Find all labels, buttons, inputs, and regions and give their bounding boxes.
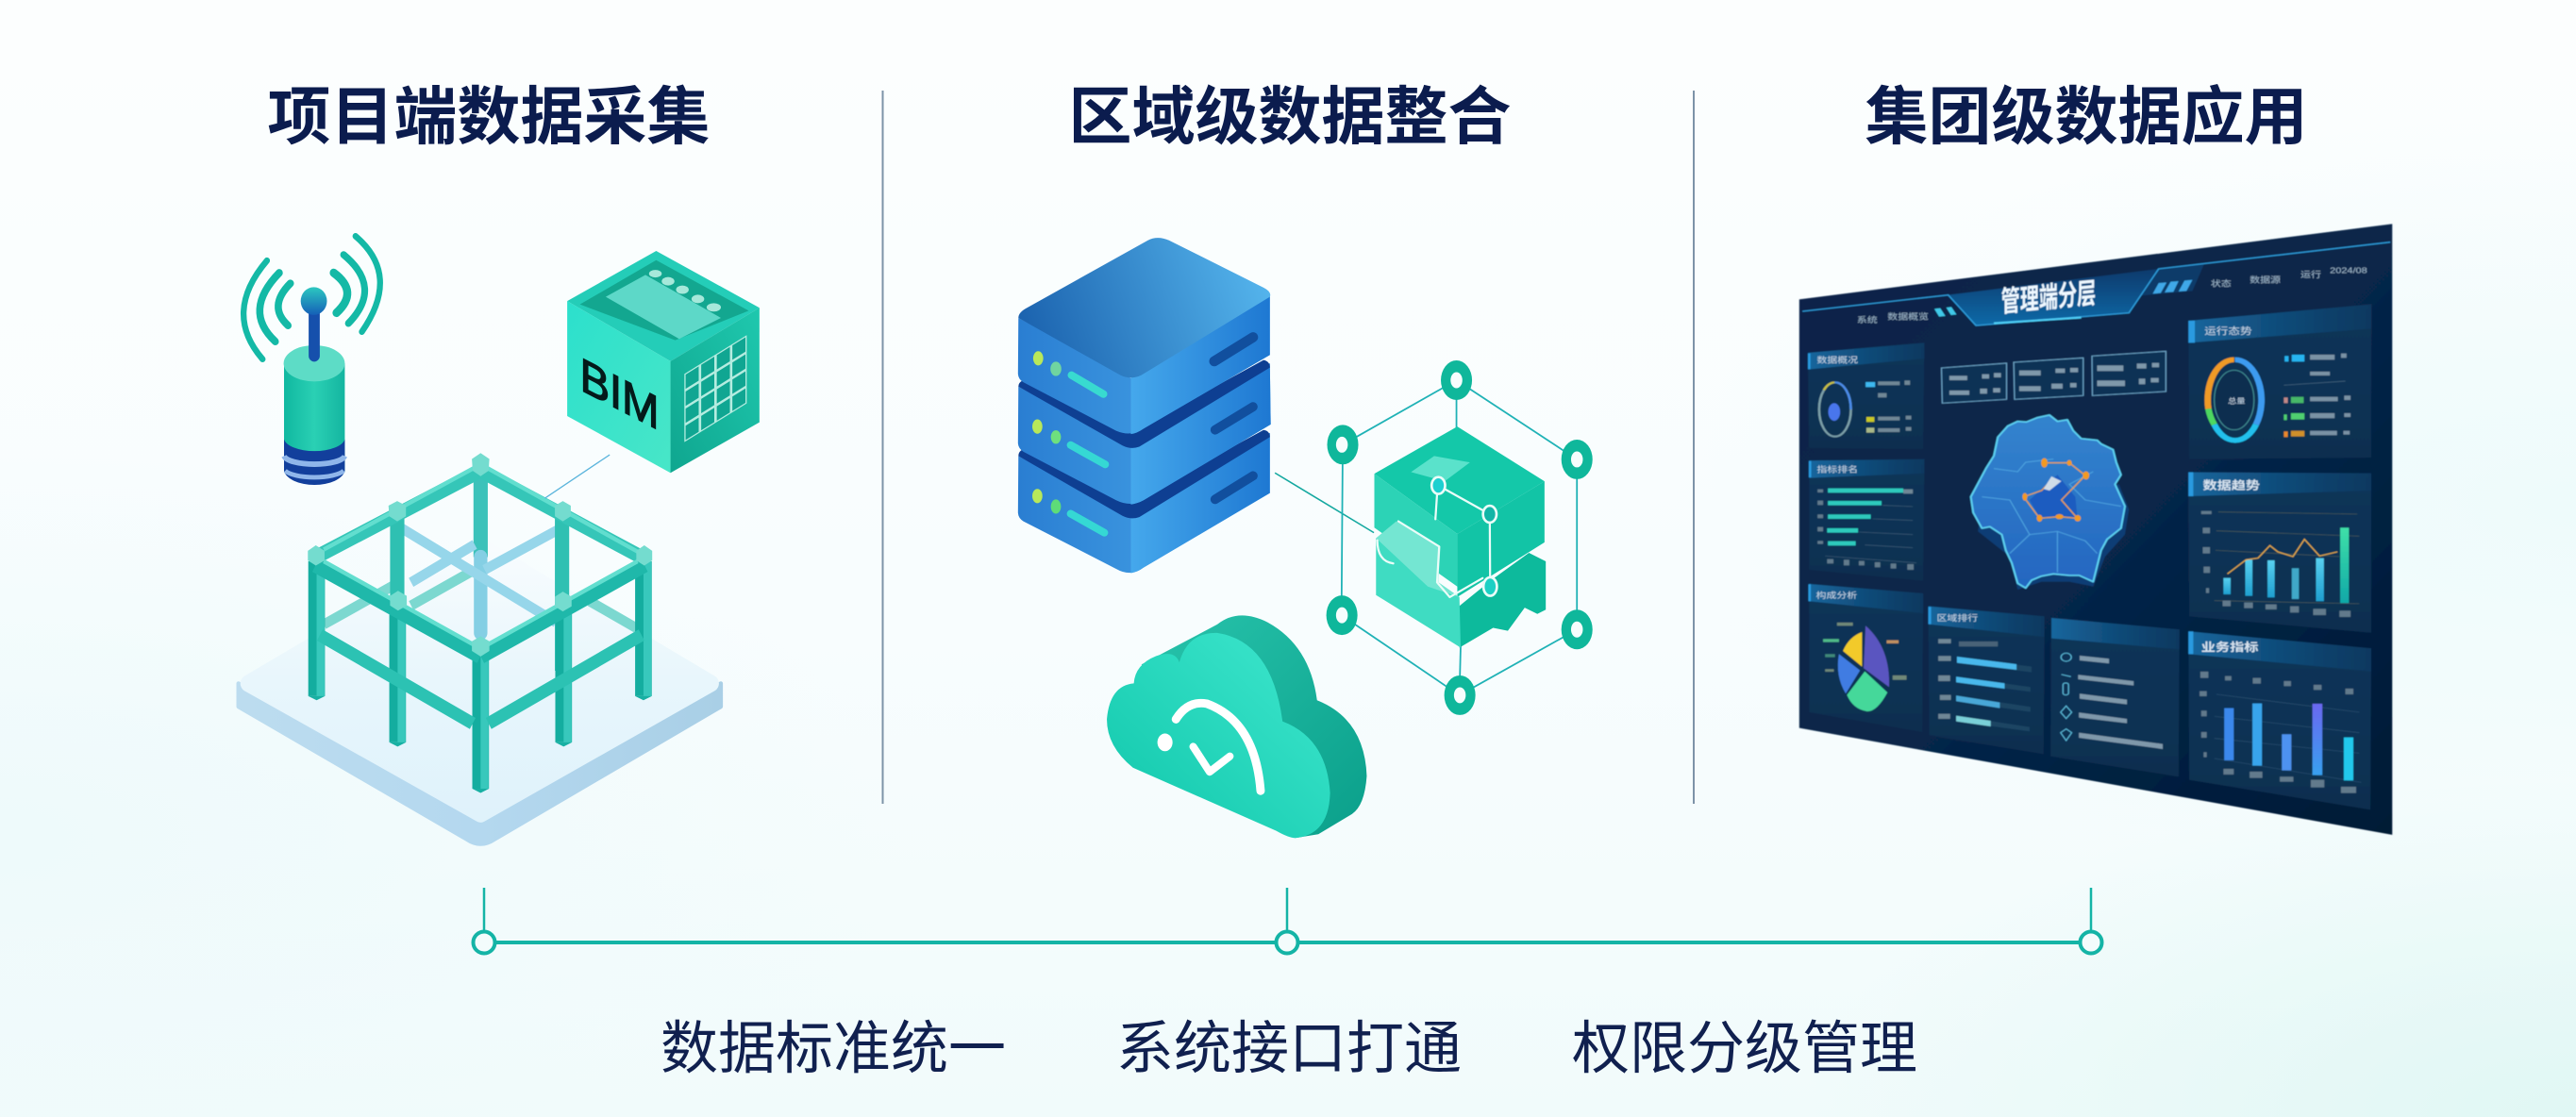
- panel: left donut: 数据概况: [1816, 355, 1858, 365]
- dashboard header: 管理端分层: [2001, 276, 2096, 319]
- heading: 项目端数据采集: 项目端数据采集: [268, 82, 710, 153]
- panel: column chart: 业务指标: [2201, 641, 2259, 654]
- icon: building steel frame: [308, 453, 652, 792]
- icon: BIM cube: BIM: [580, 346, 659, 441]
- panel: left horizontal bars: 指标排名: [1816, 464, 1858, 475]
- timeline node 2: [1276, 932, 1298, 953]
- panel: pie chart: [1809, 584, 1923, 732]
- panel: progress bars: [1929, 607, 2045, 754]
- illustration: project site data collection: [239, 236, 760, 844]
- panel: right bars and line chart: 数据趋势: [2202, 478, 2260, 492]
- panel: right donut: [2188, 305, 2371, 459]
- icon: BIM cube: [567, 251, 760, 473]
- timeline connector: [474, 888, 2102, 953]
- dashboard header: [1802, 242, 2390, 325]
- dashboard header: 数据源: [2250, 275, 2281, 285]
- panel: status list: [2050, 618, 2180, 776]
- icon: wireless sensor antenna: [243, 236, 380, 485]
- connector line from server to data cube: [1275, 473, 1374, 533]
- KPI stat cards: [1942, 351, 2166, 403]
- map of region with network: [1971, 415, 2129, 590]
- label: 权限分级管理: 权限分级管理: [1572, 1016, 1917, 1080]
- lower dashboard panels: [1809, 584, 2371, 809]
- dashboard header: 2024/08: [2330, 266, 2367, 275]
- panel: left donut: [1808, 342, 1924, 449]
- dashboard header: 运行: [2300, 269, 2321, 280]
- illustration: group level data dashboard screen: [1799, 224, 2392, 835]
- icon: data cube node network: [1327, 360, 1593, 715]
- heading: 集团级数据应用: 集团级数据应用: [1865, 82, 2308, 153]
- server layer 1: [1018, 238, 1270, 434]
- heading: 区域级数据整合: 区域级数据整合: [1068, 82, 1512, 153]
- panel: pie chart: 构成分析: [1816, 590, 1857, 601]
- panel: left horizontal bars: [1809, 459, 1924, 581]
- timeline node 1: [474, 932, 494, 953]
- panel: right bars and line chart: [2188, 473, 2371, 633]
- dashboard header: 系统: [1857, 314, 1878, 325]
- panel: column chart: [2188, 631, 2371, 809]
- panel: progress bars: 区域排行: [1936, 612, 1978, 624]
- dashboard screen background: [1799, 224, 2392, 835]
- icon: server stack: [1018, 238, 1271, 573]
- dashboard header: 状态: [2211, 278, 2232, 289]
- server layer 2: [1018, 360, 1271, 505]
- illustration: regional data integration: [1018, 238, 1593, 838]
- dashboard header: 数据概览: [1887, 311, 1929, 322]
- label: 数据标准统一: 数据标准统一: [661, 1016, 1006, 1080]
- server layer 3: [1018, 430, 1270, 573]
- icon: construction platform: [239, 546, 721, 844]
- panel: right donut: 运行态势: [2204, 326, 2252, 337]
- timeline node 3: [2080, 932, 2102, 953]
- panel: right donut: 总量: [2228, 396, 2245, 405]
- connector line from frame to BIM cube: [545, 455, 610, 498]
- label: 系统接口打通: 系统接口打通: [1116, 1016, 1462, 1080]
- icon: cloud with check: [1107, 615, 1366, 838]
